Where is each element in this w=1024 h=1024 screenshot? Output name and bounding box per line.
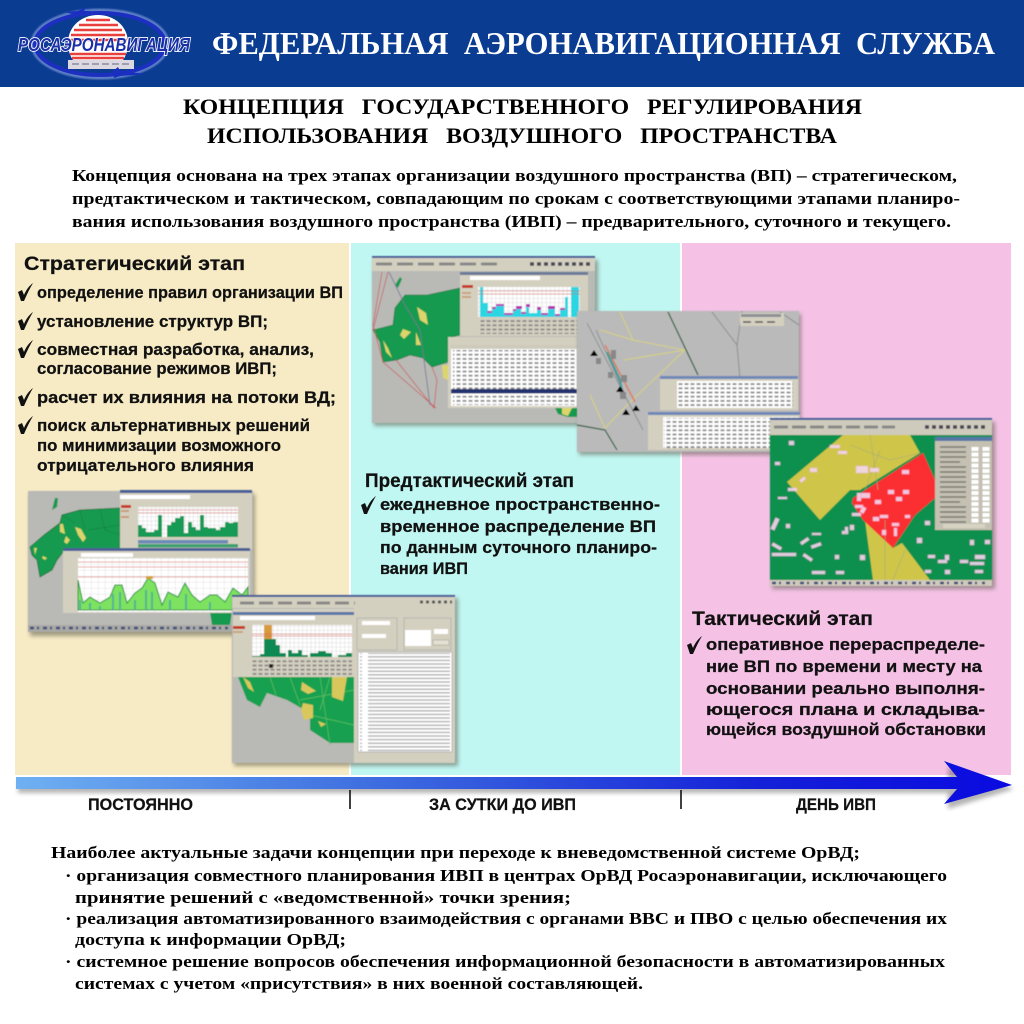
- checklist: pre-tactical stage: по данным суточного планиро-: [380, 539, 657, 557]
- timeline ticks: [350, 790, 681, 809]
- checklist: pre-tactical stage: временное распределение ВП: [380, 518, 656, 536]
- timeline labels: ПОСТОЯННО: [88, 795, 193, 814]
- intro paragraph: предтактическом и тактическом, совпадающим по срокам с соответствующими этапами планиро-: [72, 189, 960, 208]
- panel: pre-tactical stage background: [351, 243, 680, 775]
- checklist: pre-tactical stage: вания ИВП: [380, 560, 468, 578]
- main title: ИСПОЛЬЗОВАНИЯ ВОЗДУШНОГО ПРОСТРАНСТВА: [207, 123, 837, 148]
- checklist: pre-tactical stage: [361, 496, 660, 578]
- main title: КОНЦЕПЦИЯ ГОСУДАРСТВЕННОГО РЕГУЛИРОВАНИЯ: [183, 94, 862, 119]
- checklist: strategic stage: [18, 283, 343, 475]
- checklist: tactical stage: ющейся воздушной обстановки: [706, 721, 986, 739]
- checklist: strategic stage: согласование режимов ИВП;: [37, 360, 277, 378]
- heading: strategic stage: Стратегический этап: [24, 254, 245, 275]
- main title: [183, 94, 862, 148]
- bottom tasks text: · реализация автоматизированного взаимодействия с органами ВВС и ПВО с целью обеспечения их: [65, 909, 948, 928]
- checklist: tactical stage: [687, 636, 986, 739]
- checklist: strategic stage: определение правил организации ВП: [37, 284, 343, 302]
- checklist: strategic stage: расчет их влияния на потоки ВД;: [37, 389, 336, 407]
- intro paragraph: вания использования воздушного пространства (ИВП) – предварительного, суточного и текущего.: [72, 212, 951, 231]
- bottom tasks text: [51, 843, 948, 993]
- strategic stage text: [18, 254, 343, 475]
- bottom tasks text: Наиболее актуальные задачи концепции при переходе к вневедомственной системе ОрВД;: [51, 843, 860, 862]
- checklist: tactical stage: оперативное перераспределе-: [706, 636, 985, 654]
- screenshot: strategic map with load charts: [28, 490, 255, 636]
- tactical stage text: [687, 609, 986, 739]
- checklist: tactical stage: ние ВП по времени и месту на: [706, 658, 983, 676]
- heading: tactical stage: Тактический этап: [692, 609, 873, 630]
- header band: [0, 0, 1024, 87]
- checklist: tactical stage: ющегося плана и складыва-: [706, 701, 985, 719]
- heading: pre-tactical stage: Предтактический этап: [365, 471, 574, 492]
- bottom tasks text: принятие решений с «ведомственной» точки зрения;: [75, 888, 571, 907]
- logo wordmark: РОСАЭРОНАВИГАЦИЯ: [18, 35, 191, 55]
- pre-tactical stage text: [361, 471, 660, 578]
- checklist: strategic stage: совместная разработка, анализ,: [37, 341, 314, 359]
- intro paragraph: Концепция основана на трех этапах организации воздушного пространства (ВП) – стратегическом,: [72, 166, 957, 185]
- screenshot: regional load chart with plan list: [232, 595, 458, 766]
- checklist: strategic stage: по минимизации возможного: [37, 437, 281, 455]
- checklist: strategic stage: поиск альтернативных решений: [37, 417, 310, 435]
- checklist: pre-tactical stage: ежедневное пространственно-: [380, 496, 660, 514]
- timeline labels: ДЕНЬ ИВП: [796, 795, 876, 814]
- screenshot: tactical sector map: [770, 418, 995, 589]
- bottom tasks text: системах с учетом «присутствия» в них военной составляющей.: [75, 974, 643, 993]
- timeline arrow: [16, 761, 1014, 809]
- header title: ФЕДЕРАЛЬНАЯ АЭРОНАВИГАЦИОННАЯ СЛУЖБА: [212, 25, 995, 61]
- timeline labels: ЗА СУТКИ ДО ИВП: [429, 795, 576, 814]
- screenshot: pre-tactical route map with tables: [577, 311, 801, 455]
- bottom tasks text: · системное решение вопросов обеспечения информационной безопасности в автоматизированных: [65, 952, 946, 971]
- panel: tactical stage background: [682, 243, 1011, 775]
- timeline labels: [88, 795, 876, 814]
- checklist: strategic stage: установление структур ВП;: [37, 313, 268, 331]
- checklist: strategic stage: отрицательного влияния: [37, 457, 254, 475]
- logo: Росаэронавигация: [18, 7, 191, 78]
- checklist: tactical stage: основании реально выполня-: [706, 680, 985, 698]
- panel: strategic stage background: [15, 243, 349, 775]
- screenshot: pre-tactical map with chart and table: [372, 256, 598, 426]
- intro paragraph: [72, 166, 960, 231]
- bottom tasks text: доступа к информации ОрВД;: [75, 930, 346, 949]
- bottom tasks text: · организация совместного планирования ИВП в центрах ОрВД Росаэронавигации, исключающего: [65, 866, 947, 885]
